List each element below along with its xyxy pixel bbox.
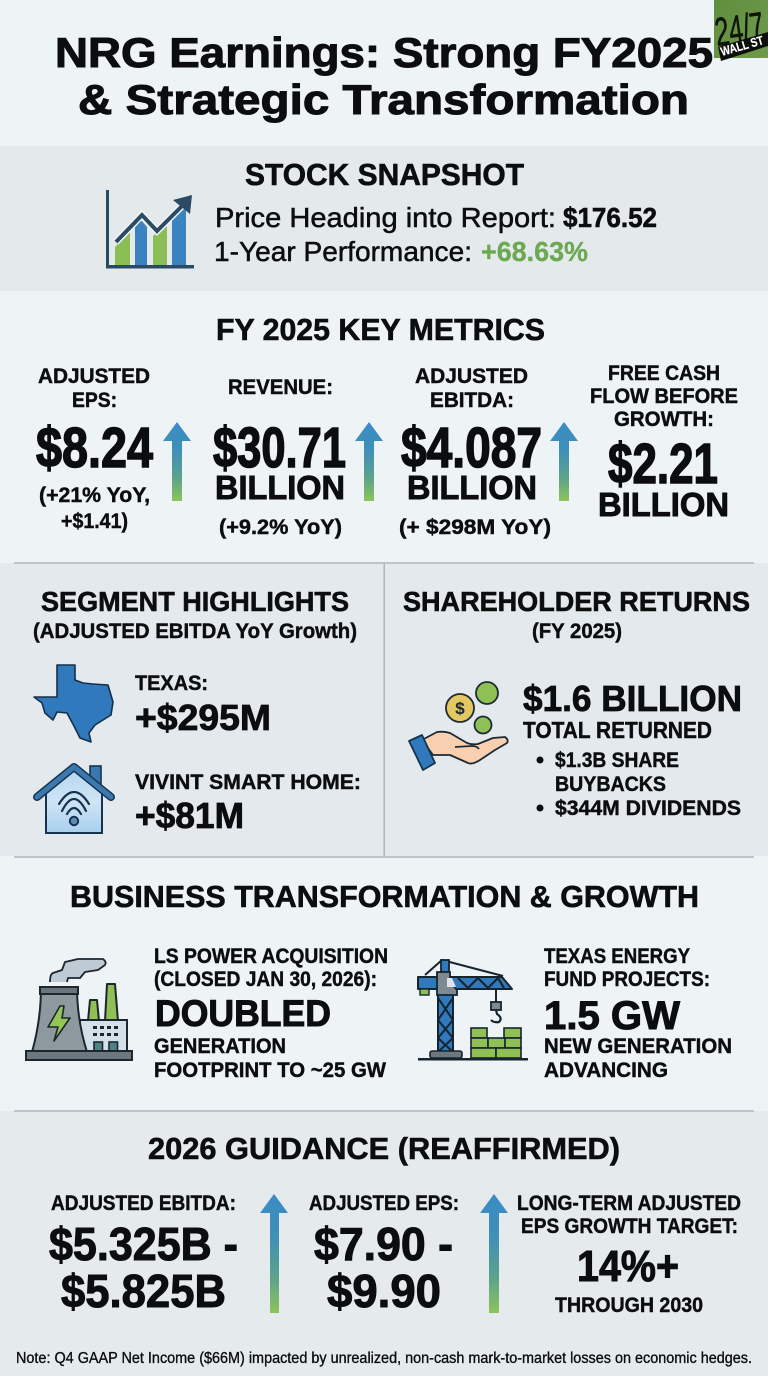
metric: revenue: BILLION <box>215 469 345 506</box>
panel: segment highlights <box>33 586 361 836</box>
text: Texas: TEXAS: <box>135 671 208 695</box>
heading: key metrics: FY 2025 KEY METRICS <box>216 312 545 347</box>
text: 1-year performance: 1-Year Performance: <box>214 236 472 267</box>
guidance: long-term target: EPS GROWTH TARGET: <box>521 1214 738 1238</box>
metric: adjusted EPS: EPS: <box>72 388 117 412</box>
list: returns breakdown: BUYBACKS <box>555 772 666 796</box>
text: total returned: TOTAL RETURNED <box>523 717 712 743</box>
text: 1-year performance: +68.63% <box>481 236 588 267</box>
guidance: adjusted EBITDA: ADJUSTED EBITDA: <box>51 1191 236 1215</box>
guidance: long-term target <box>517 1191 741 1317</box>
metric: free cash flow: BILLION <box>598 486 729 523</box>
metric: free cash flow: $2.21 <box>608 432 718 496</box>
guidance: adjusted EBITDA: $5.825B <box>61 1265 226 1317</box>
text: price heading into report: Price Heading into Report: <box>215 202 556 233</box>
panel: stock snapshot <box>106 157 657 268</box>
text: Texas Energy Fund: 1.5 GW <box>544 994 680 1038</box>
icon: hand with coins <box>409 682 508 770</box>
text: LS Power acquisition <box>154 944 388 1082</box>
icon: smart home <box>37 766 111 833</box>
text: LS Power acquisition: FOOTPRINT TO ~25 GW <box>154 1058 387 1082</box>
text: Texas Energy Fund: TEXAS ENERGY <box>544 944 690 968</box>
heading: segment highlights: (ADJUSTED EBITDA YoY Growth) <box>33 619 357 643</box>
heading: shareholder returns <box>403 586 750 643</box>
panel: shareholder returns <box>403 586 750 820</box>
metric: adjusted EBITDA: BILLION <box>407 469 537 506</box>
guidance: long-term target: THROUGH 2030 <box>555 1293 703 1317</box>
metric: revenue: (+9.2% YoY) <box>219 515 342 539</box>
text: Texas <box>135 671 271 738</box>
guidance: adjusted EPS <box>309 1191 459 1317</box>
heading: shareholder returns: (FY 2025) <box>532 619 622 643</box>
metric: revenue <box>213 375 346 539</box>
text: LS Power acquisition: (CLOSED JAN 30, 2026): <box>154 967 377 991</box>
text: price heading into report: $176.52 <box>563 202 657 233</box>
heading: stock snapshot: STOCK SNAPSHOT <box>245 157 524 192</box>
heading: business transformation: BUSINESS TRANSFORMATION & GROWTH <box>70 879 699 914</box>
metric: free cash flow <box>590 361 738 523</box>
icon: stock chart <box>106 190 194 268</box>
list: returns breakdown: $344M DIVIDENDS <box>555 796 741 820</box>
heading: segment highlights: SEGMENT HIGHLIGHTS <box>41 586 349 617</box>
icon: construction crane <box>418 960 528 1060</box>
metric: adjusted EBITDA: (+ $298M YoY) <box>399 515 551 539</box>
metric: free cash flow: FLOW BEFORE <box>590 384 738 408</box>
title <box>55 29 713 123</box>
text: Vivint smart home: VIVINT SMART HOME: <box>135 770 361 794</box>
guidance: long-term target: LONG-TERM ADJUSTED <box>517 1191 741 1215</box>
text: Texas Energy Fund <box>544 944 732 1082</box>
metric: free cash flow: GROWTH: <box>614 407 714 431</box>
text: total returned <box>523 678 742 743</box>
icon: power plant <box>26 959 132 1060</box>
text: LS Power acquisition: GENERATION <box>154 1034 286 1058</box>
text: 1-year performance <box>214 236 588 267</box>
metric: adjusted EPS: ADJUSTED <box>38 364 150 388</box>
text: Texas Energy Fund: NEW GENERATION <box>544 1034 732 1058</box>
metric: adjusted EBITDA: $4.087 <box>401 416 542 480</box>
text: total returned: $1.6 BILLION <box>523 678 742 719</box>
icon: Texas <box>34 665 113 742</box>
arrow <box>260 1194 288 1313</box>
heading: segment highlights <box>33 586 357 643</box>
metric: adjusted EPS <box>36 364 153 533</box>
panel: business transformation <box>26 879 732 1082</box>
heading: guidance: 2026 GUIDANCE (REAFFIRMED) <box>148 1131 620 1166</box>
text: Texas Energy Fund: FUND PROJECTS: <box>544 967 710 991</box>
list: returns breakdown <box>536 748 741 820</box>
metric: adjusted EPS: (+21% YoY, <box>39 483 150 507</box>
arrow <box>163 422 191 501</box>
arrow <box>355 422 383 501</box>
metric: adjusted EPS: $8.24 <box>36 416 153 480</box>
text: Texas: +$295M <box>135 697 271 738</box>
arrow <box>550 422 578 501</box>
text: Vivint smart home <box>135 770 361 836</box>
metric: adjusted EBITDA <box>399 364 551 539</box>
panel: FY 2025 key metrics <box>36 312 738 539</box>
heading: shareholder returns: SHAREHOLDER RETURNS <box>403 586 750 617</box>
list: returns breakdown: $1.3B SHARE <box>555 748 679 772</box>
metric: revenue: REVENUE: <box>228 375 333 399</box>
arrow <box>480 1194 508 1313</box>
metric: adjusted EBITDA: EBITDA: <box>430 388 514 412</box>
panel: 2026 guidance <box>16 1131 752 1367</box>
text: Vivint smart home: +$81M <box>135 795 244 836</box>
guidance: long-term target: 14%+ <box>577 1242 679 1291</box>
metric: revenue: $30.71 <box>213 416 346 480</box>
guidance: adjusted EPS: $7.90 - <box>314 1218 453 1270</box>
metric: free cash flow: FREE CASH <box>608 361 720 385</box>
metric: adjusted EPS: +$1.41) <box>61 509 128 533</box>
icon: hand with coins: $ <box>455 699 465 718</box>
title: & Strategic Transformation <box>78 76 689 123</box>
guidance: adjusted EPS: ADJUSTED EPS: <box>309 1191 459 1215</box>
metric: adjusted EBITDA: ADJUSTED <box>415 364 528 388</box>
text: LS Power acquisition: DOUBLED <box>155 993 331 1034</box>
text: Texas Energy Fund: ADVANCING <box>544 1058 668 1082</box>
guidance: adjusted EPS: $9.90 <box>327 1265 441 1317</box>
title: NRG Earnings: Strong FY2025 <box>55 29 713 76</box>
guidance: adjusted EBITDA <box>49 1191 238 1317</box>
text: LS Power acquisition: LS POWER ACQUISITION <box>154 944 388 968</box>
guidance: adjusted EBITDA: $5.325B - <box>49 1218 238 1270</box>
